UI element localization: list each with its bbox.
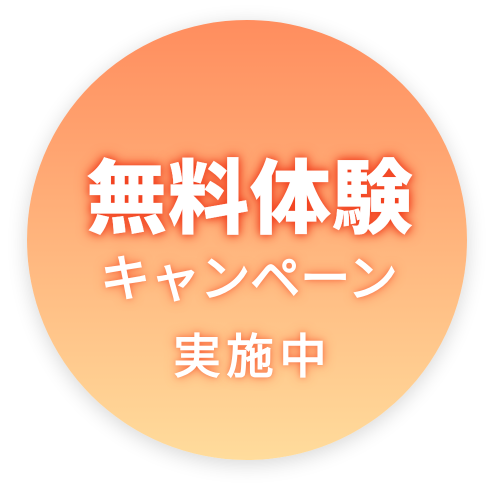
badge circle (27, 20, 467, 460)
text: in progress: 実施中 (174, 330, 332, 383)
heading: free trial: 無料体験 (86, 155, 414, 245)
subheading: campaign: キャンペーン (100, 251, 398, 307)
